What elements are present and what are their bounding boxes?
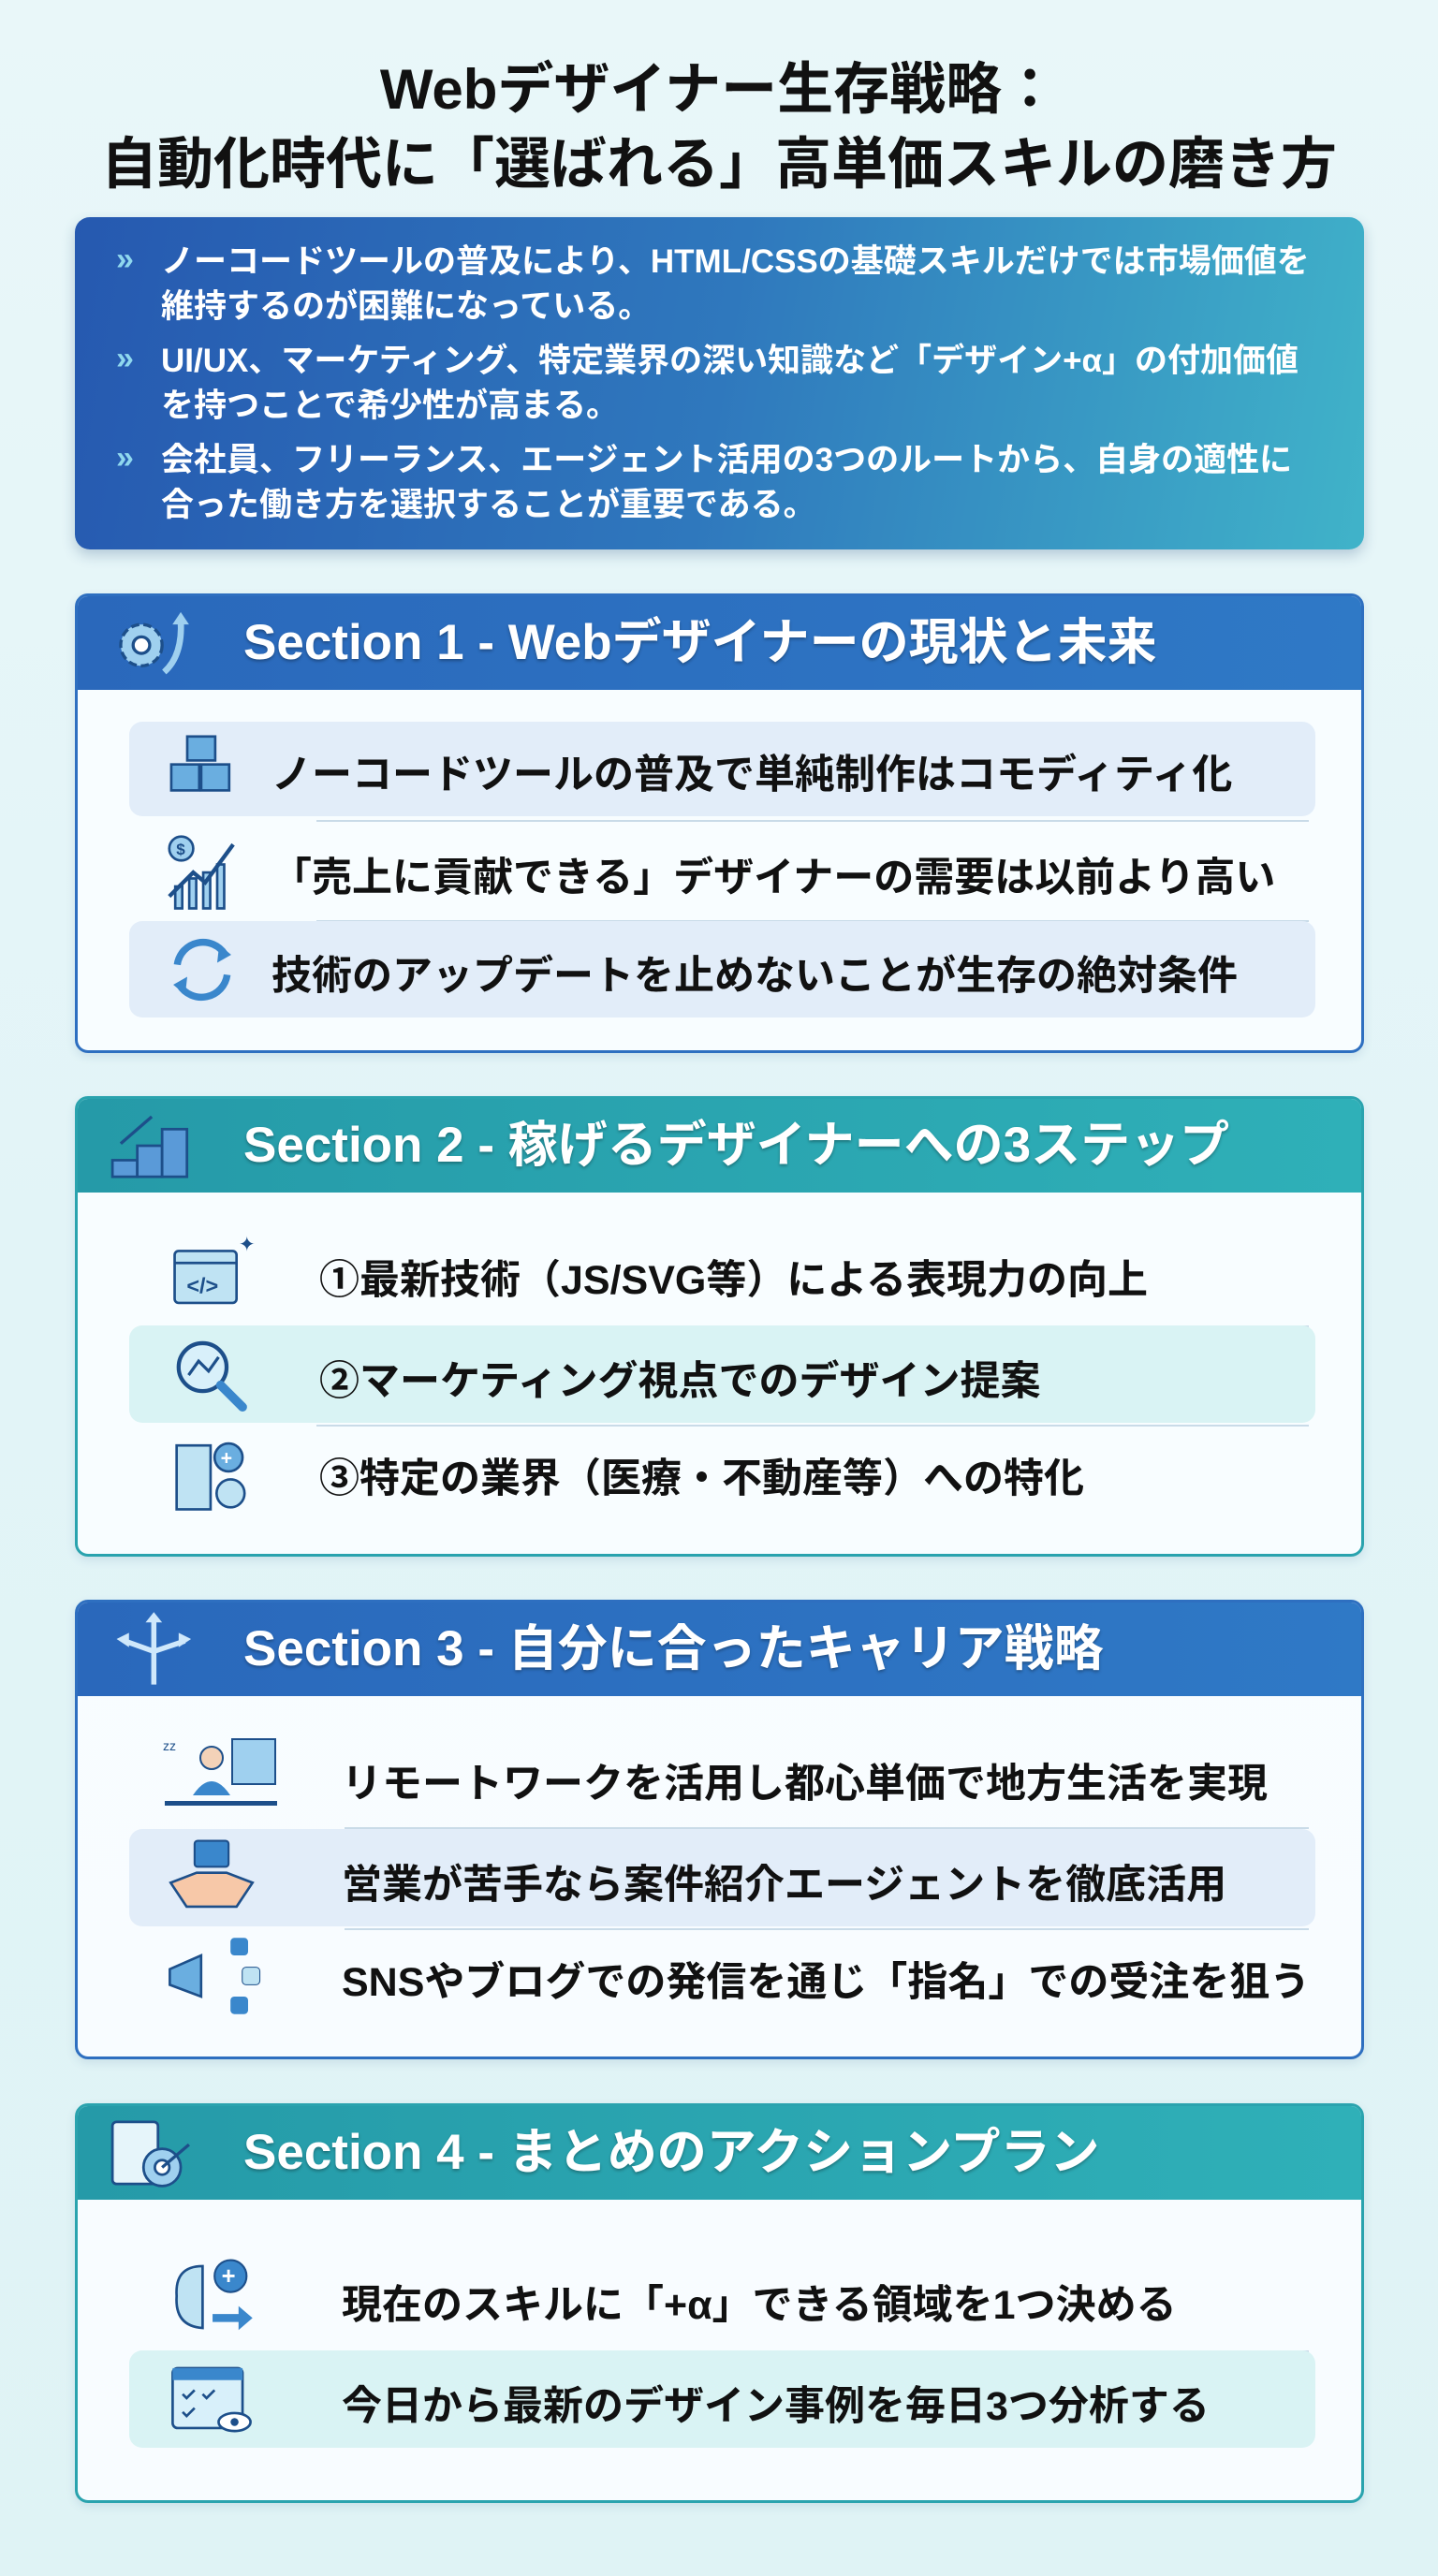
- section 1 header: [78, 596, 1361, 690]
- row 1: ①最新技術（JS/SVG等）による表現力の向上: [319, 1258, 1148, 1303]
- row 1: リモートワークを活用し都心単価で地方生活を実現: [342, 1762, 1268, 1807]
- panel: section 4: [75, 2103, 1364, 2503]
- panel: summary: [75, 217, 1364, 549]
- panel: section 1: [75, 593, 1364, 1053]
- row 3: SNSやブログでの発信を通じ「指名」での受注を狙う: [342, 1960, 1310, 2005]
- row 2: 「売上に貢献できる」デザイナーの需要は以前より高い: [271, 856, 1275, 900]
- section 1 header: Section 1 - Webデザイナーの現状と未来: [243, 615, 1157, 670]
- section 2 header: [78, 1099, 1361, 1193]
- panel: summary: 会社員、フリーランス、エージェント活用の3つのルートから、自身の適性に: [161, 442, 1292, 478]
- section 4 header: Section 4 - まとめのアクションプラン: [243, 2125, 1099, 2180]
- panel: section 2: [75, 1096, 1364, 1557]
- panel: summary: »: [116, 440, 134, 476]
- icon: clipboard target: [110, 2121, 190, 2188]
- icon: stairs: [110, 1116, 189, 1178]
- row 2: $: [176, 841, 185, 858]
- row 2: ②マーケティング視点でのデザイン提案: [319, 1359, 1041, 1404]
- section 3 header: Section 3 - 自分に合ったキャリア戦略: [243, 1621, 1104, 1676]
- panel: section 3: [75, 1600, 1364, 2059]
- panel: summary: を持つことで希少性が高まる。: [161, 388, 619, 424]
- row 2: [129, 2350, 1315, 2448]
- row 2: [129, 1829, 1315, 1926]
- row 3: 技術のアップデートを止めないことが生存の絶対条件: [271, 954, 1238, 999]
- icon: gear with arrow: [119, 612, 189, 674]
- row 1: ✦: [239, 1233, 256, 1255]
- bullet 1: [116, 242, 1310, 325]
- row 3: [129, 921, 1315, 1017]
- panel: summary: »: [116, 341, 134, 376]
- row 1: 現在のスキルに「+α」できる領域を1つ決める: [342, 2283, 1177, 2328]
- title: 自動化時代に「選ばれる」高単価スキルの磨き方: [101, 133, 1337, 196]
- section 4 header: [78, 2106, 1361, 2200]
- row 2: 今日から最新のデザイン事例を毎日3つ分析する: [342, 2384, 1210, 2429]
- bullet 3: [116, 440, 1292, 523]
- panel: summary: 合った働き方を選択することが重要である。: [161, 487, 816, 523]
- row 1: [173, 1233, 1148, 1305]
- row 3: ③特定の業界（医療・不動産等）への特化: [319, 1456, 1084, 1501]
- icon: branching arrows: [116, 1612, 191, 1685]
- row 1: </>: [186, 1273, 218, 1297]
- title: Webデザイナー生存戦略：: [380, 58, 1058, 121]
- panel: summary: ノーコードツールの普及により、HTML/CSSの基礎スキルだけでは市場価値を: [161, 243, 1310, 280]
- row 2: 営業が苦手なら案件紹介エージェントを徹底活用: [342, 1863, 1226, 1908]
- title: [101, 58, 1337, 196]
- row 3: +: [221, 1446, 232, 1469]
- row 1: zz: [163, 1738, 176, 1753]
- row 1: [163, 1738, 1268, 1807]
- section 2 header: Section 2 - 稼げるデザイナーへの3ステップ: [243, 1118, 1229, 1173]
- row 3: [169, 1938, 1310, 2014]
- row 3: [175, 1442, 1084, 1511]
- bullet 2: [116, 341, 1299, 424]
- row 1: +: [222, 2263, 236, 2290]
- panel: summary: »: [116, 242, 134, 277]
- row 1: [129, 722, 1315, 816]
- panel: summary: UI/UX、マーケティング、特定業界の深い知識など「デザイン+α」の付加価値: [161, 343, 1299, 379]
- section 3 header: [78, 1603, 1361, 1696]
- row 2: [129, 1325, 1315, 1423]
- row 2: [168, 835, 1275, 910]
- row 1: ノーコードツールの普及で単純制作はコモディティ化: [271, 753, 1232, 798]
- panel: summary: 維持するのが困難になっている。: [161, 288, 651, 325]
- row 1: [175, 2260, 1177, 2331]
